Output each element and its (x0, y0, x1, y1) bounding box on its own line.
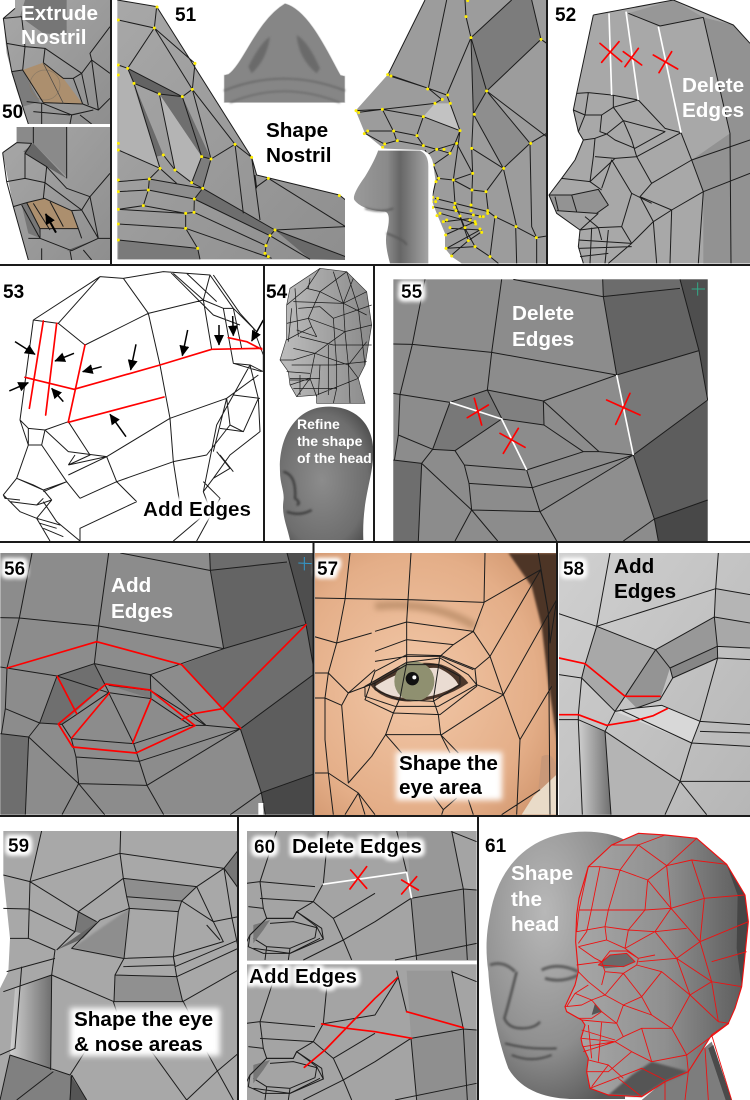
label: Refine the shape of the head: of the head (297, 450, 372, 466)
eye (370, 661, 468, 701)
label: Shape the head: Shape (511, 862, 573, 885)
red crosses (467, 393, 640, 453)
label: Shape the eye area: Shape the (399, 752, 498, 775)
label: Delete Edges (52): Delete (682, 74, 744, 97)
label: Delete Edges (60): Delete Edges (292, 835, 422, 858)
panel: step 61 (487, 832, 748, 1100)
label: Shape Nostril (266, 119, 332, 167)
label: Extrude Nostril: Extrude (21, 2, 98, 25)
label: Refine the shape of the head (297, 416, 372, 466)
label: Shape the head: the (511, 888, 542, 911)
panel: step 58 (559, 553, 750, 816)
panel: step 54 render head (280, 407, 373, 540)
black arrows (9, 316, 263, 437)
red crosses (350, 867, 418, 894)
added edges in red (25, 321, 262, 422)
label: 54: 54 (266, 282, 288, 303)
panel: step 53 wireframe (3, 272, 263, 541)
arrow (46, 214, 56, 233)
axis gizmo (298, 557, 312, 570)
ear and neck (538, 755, 556, 790)
deleted edges in white (323, 872, 412, 898)
neck (642, 1042, 732, 1100)
panel: step 60 top (247, 831, 477, 961)
label: Delete Edges (52): Edges (682, 99, 744, 122)
nose render inset (345, 148, 434, 264)
label: 56: 56 (4, 559, 25, 580)
label: 50: 50 (2, 102, 23, 123)
added edges in red (559, 658, 667, 725)
label: 59: 59 (8, 836, 29, 857)
label: Shape the eye & nose areas: & nose areas (74, 1033, 203, 1056)
mesh head (565, 833, 748, 1100)
label: 51: 51 (175, 5, 197, 26)
axis gizmo (692, 282, 705, 296)
label: Delete Edges (55) (512, 302, 574, 351)
panel: step 56 (0, 553, 317, 815)
label: Delete Edges (55): Edges (512, 328, 574, 351)
panel: step 59 (0, 831, 238, 1100)
label: Shape the head (511, 862, 573, 936)
label: Delete Edges (52) (682, 74, 744, 122)
label: Extrude Nostril (21, 2, 98, 49)
label: Shape Nostril: Nostril (266, 144, 332, 167)
label: Refine the shape of the head: Refine (297, 416, 340, 432)
panel: step 57 photo with mesh (312, 553, 558, 816)
selected nostril face (27, 198, 78, 229)
label: Add Edges (53): Add Edges (143, 498, 251, 521)
label: Add Edges (58): Edges (614, 580, 676, 603)
label: Add Edges (58): Add (614, 555, 654, 578)
panel: step 51 mesh (117, 0, 547, 264)
label: 53: 53 (3, 282, 24, 303)
label: Shape the eye area: eye area (399, 776, 482, 799)
label: Add Edges (58) (614, 555, 676, 603)
white tick (258, 803, 263, 815)
label: 52: 52 (555, 5, 576, 26)
label: Refine the shape of the head: the shape (297, 433, 363, 449)
deleted edges in white (609, 12, 681, 133)
panel: step 50 top (3, 0, 111, 124)
hair (508, 553, 558, 750)
nose side mesh (345, 0, 547, 264)
added edges in red (304, 977, 463, 1067)
smooth render face (487, 832, 625, 1099)
label: Delete Edges (55): Delete (512, 302, 574, 325)
label: Add Edges (60): Add Edges (249, 965, 357, 988)
selected nostril face (23, 63, 83, 104)
panel: step 60 bottom (247, 964, 477, 1100)
red crosses (600, 42, 678, 73)
white separators (0, 124, 477, 964)
label: Shape the eye & nose areas (70, 1008, 220, 1056)
label: Add Edges (56): Add (111, 574, 151, 597)
label: 60: 60 (254, 837, 275, 858)
label: Shape the eye area (396, 752, 502, 800)
panel: step 54 mesh head (280, 268, 372, 403)
nostril render inset (224, 3, 345, 103)
panel: step 52 (549, 0, 750, 263)
label: Shape Nostril: Shape (266, 119, 328, 142)
label: 57: 57 (317, 559, 338, 580)
label: 55: 55 (401, 282, 423, 303)
label: Shape the head: head (511, 913, 559, 936)
added edges in red (7, 625, 306, 753)
label: 61: 61 (485, 836, 507, 857)
panel: step 50 bottom (3, 127, 111, 260)
label: Shape the eye & nose areas: Shape the eye (74, 1008, 213, 1031)
label: Add Edges (56) (111, 574, 173, 623)
label: 58: 58 (563, 559, 584, 580)
label: Add Edges (56): Edges (111, 600, 173, 623)
panel: step 55 (393, 279, 708, 541)
label: Extrude Nostril: Nostril (21, 26, 87, 49)
